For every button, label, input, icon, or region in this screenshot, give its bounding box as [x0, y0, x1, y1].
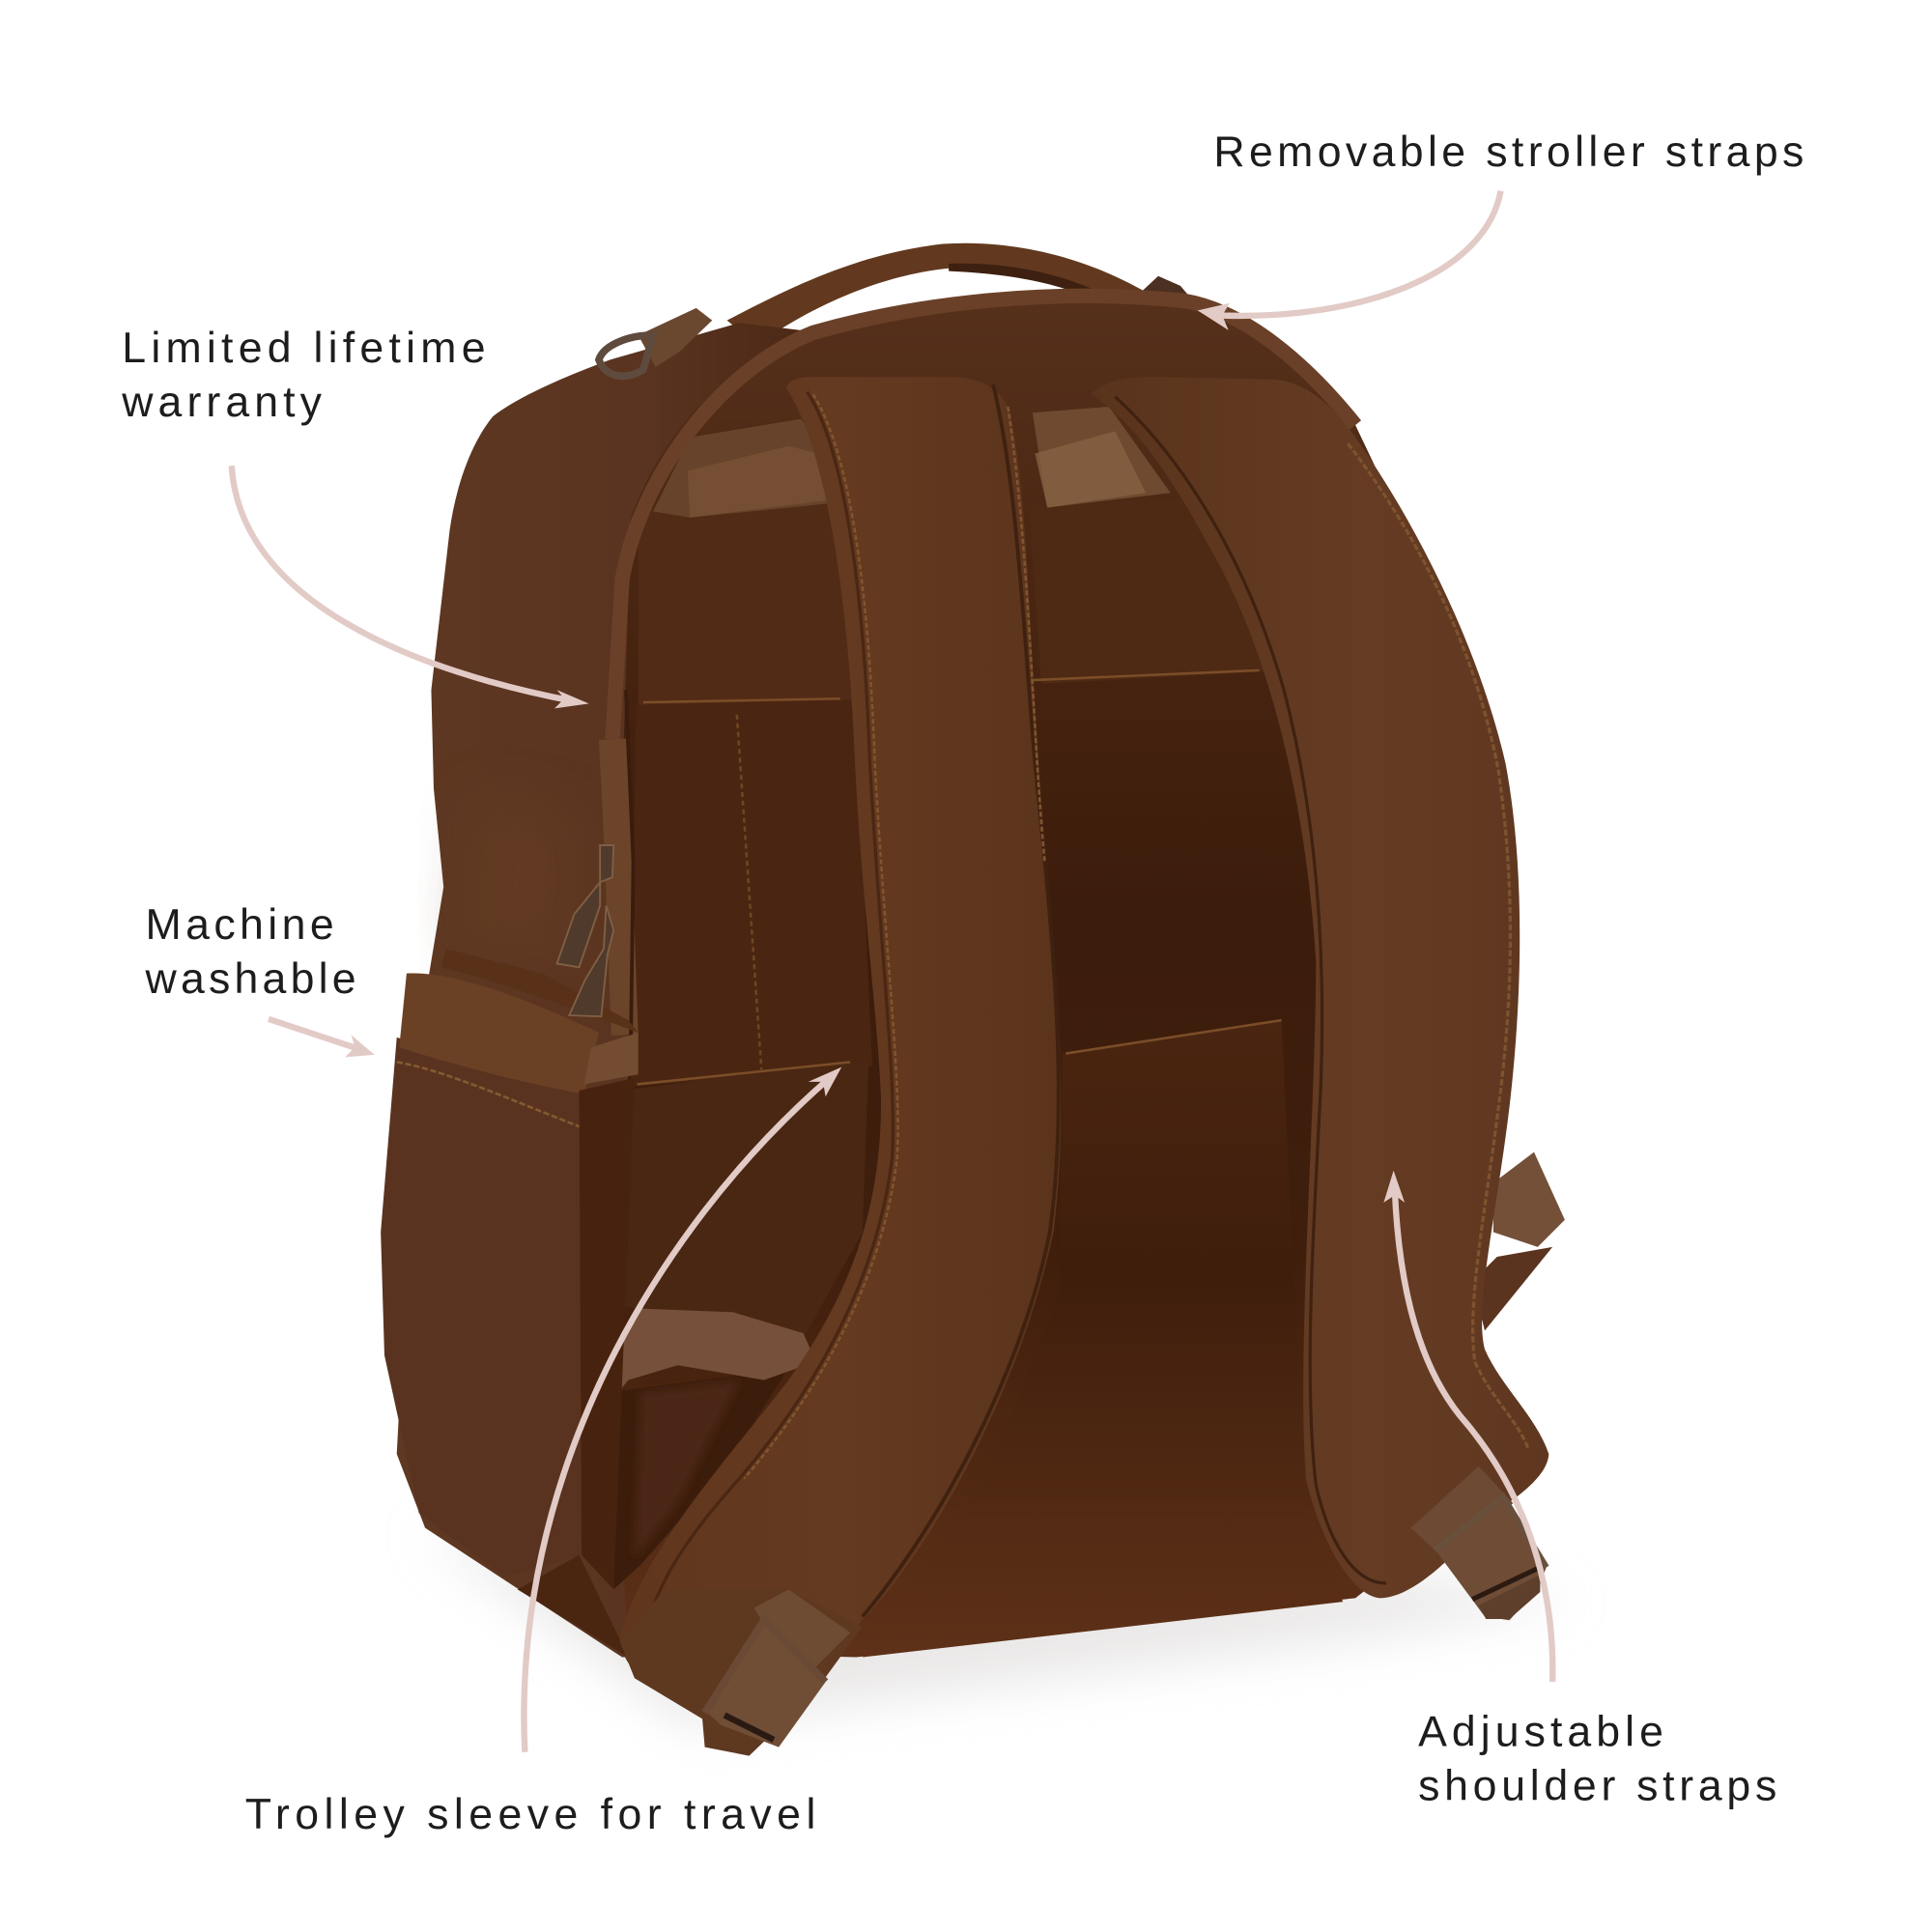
- label: limited lifetime warranty: [121, 325, 486, 426]
- side panel sheen: [456, 788, 579, 961]
- right strap buckle: [1410, 1466, 1547, 1620]
- label: machine washable: washable: [145, 955, 356, 1003]
- label: limited lifetime warranty: Limited lifetime: [122, 325, 486, 372]
- label: limited lifetime warranty: warranty: [121, 379, 323, 426]
- left middle panel: [631, 699, 872, 1087]
- top D-ring hardware: [599, 308, 712, 376]
- label: machine washable: Machine: [146, 901, 334, 949]
- centre lower panel: [863, 1020, 1343, 1658]
- arrow: limited lifetime warranty: [232, 466, 589, 708]
- lower left webbing strap: [579, 1309, 815, 1417]
- arrow: machine washable: [269, 1019, 375, 1057]
- left strap buckle: [620, 1589, 863, 1756]
- label: adjustable shoulder straps: Adjustable: [1418, 1708, 1663, 1755]
- zipper pulls: [557, 845, 613, 1016]
- back panel: [610, 298, 1479, 1658]
- right shoulder strap: [1091, 377, 1548, 1598]
- left upper panel: [639, 505, 853, 705]
- arrow: adjustable shoulder straps: [1383, 1171, 1552, 1682]
- side panel of the bag: [397, 323, 801, 1658]
- side water-bottle pocket: [381, 949, 639, 1658]
- left shoulder strap: [620, 377, 1061, 1690]
- centre upper panel: [1029, 499, 1269, 684]
- backpack illustration: [381, 243, 1577, 1756]
- arrow: trolley sleeve: [524, 1067, 841, 1752]
- ground shadow: [419, 1528, 1577, 1725]
- label: trolley sleeve for travel: Trolley sleeve for travel: [245, 1791, 815, 1838]
- label: adjustable shoulder straps: [1418, 1708, 1776, 1810]
- upper load webbing: [653, 407, 1171, 518]
- right side webbing strap: [1472, 1152, 1565, 1331]
- label: removable stroller straps: Removable stroller straps: [1213, 128, 1804, 176]
- label: adjustable shoulder straps: shoulder straps: [1418, 1763, 1776, 1810]
- dark opening below webbing: [610, 1368, 788, 1589]
- top handle: [727, 243, 1202, 345]
- stitch lines on back panel: [637, 670, 1282, 1084]
- left lower panel: [622, 1060, 868, 1343]
- zipper binding along the panel edge: [612, 296, 1355, 1041]
- arrow: removable stroller straps: [1198, 191, 1501, 330]
- label: machine washable: [145, 901, 356, 1003]
